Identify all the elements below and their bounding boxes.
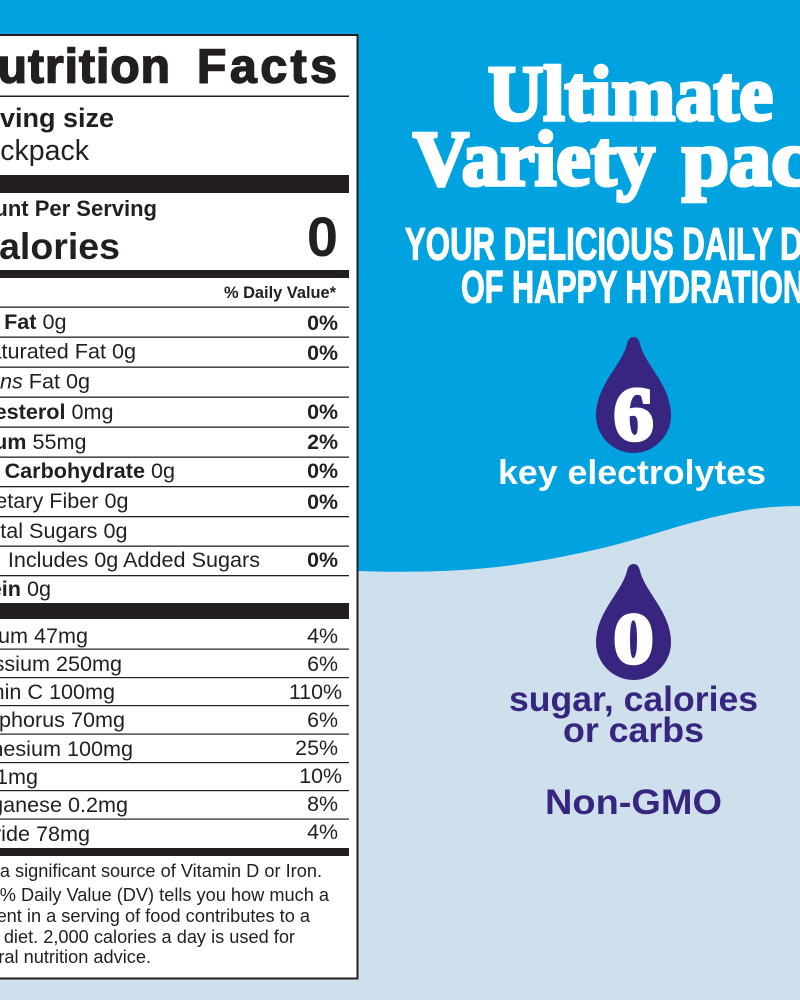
vitamin and mineral percentages: 6% (307, 708, 338, 732)
daily value header: % Daily Value* (224, 284, 337, 302)
serving size (0, 103, 114, 167)
nutrient daily value percentages: 0% (307, 490, 338, 514)
nutrient rows: Includes 0g Added Sugars (8, 547, 260, 572)
title: Ultimate Variety pack (413, 50, 800, 202)
rule under heading (0, 96, 349, 97)
nutrient daily value percentages: 0% (307, 311, 338, 335)
icon: drop with 6: 6 (614, 373, 654, 457)
label: sugar, calories or carbs: sugar, calories (509, 680, 758, 719)
vitamin and mineral percentages: 8% (307, 792, 338, 816)
nutrient daily value percentages (307, 311, 338, 572)
background: blue upper area (0, 0, 800, 600)
background: light blue wave lower area (0, 506, 800, 1000)
medium bar above footnote (0, 848, 349, 856)
amount per serving and calories (0, 196, 338, 268)
vitamin and mineral rows (0, 623, 133, 846)
vitamin and mineral percentages: 4% (307, 820, 338, 844)
medium bar (0, 270, 349, 278)
amount per serving and calories: 0 (307, 205, 338, 268)
label box (0, 35, 358, 978)
thick bar above vitamins (0, 603, 349, 619)
row dividers: macros (0, 306, 349, 576)
label: sugar, calories or carbs: or carbs (563, 711, 704, 750)
title: Ultimate Variety pack: Variety (413, 115, 655, 202)
heading: Nutrition Facts: Facts (197, 40, 337, 94)
footnote text (0, 861, 330, 967)
label: key electrolytes: key electrolytes (498, 454, 766, 492)
icon: drop with 0 (596, 564, 671, 680)
thick bar (0, 175, 349, 193)
nutrient daily value percentages: 0% (307, 459, 338, 483)
row dividers: vitamins and minerals (0, 648, 349, 820)
nutrient daily value percentages: 0% (307, 548, 338, 572)
icon: drop with 6 (596, 337, 671, 457)
vitamin and mineral percentages: 25% (295, 736, 338, 760)
heading: Nutrition Facts (0, 40, 337, 94)
subtitle: daily dose of happy hydration (405, 218, 800, 312)
label: Non-GMO: Non-GMO (545, 783, 722, 822)
nutrient daily value percentages: 2% (307, 430, 338, 454)
label: sugar, calories or carbs (509, 680, 758, 750)
title: Ultimate Variety pack: Ultimate (488, 50, 773, 137)
vitamin and mineral percentages: 4% (307, 624, 338, 648)
nutrient daily value percentages: 0% (307, 341, 338, 365)
vitamin and mineral percentages (289, 624, 342, 844)
nutrient rows (0, 309, 260, 601)
vitamin and mineral percentages: 10% (299, 764, 342, 788)
vitamin and mineral percentages: 110% (289, 680, 342, 704)
nutrient daily value percentages: 0% (307, 400, 338, 424)
icon: drop with 0: 0 (614, 599, 654, 679)
vitamin and mineral percentages: 6% (307, 652, 338, 676)
panel: nutrition facts label (0, 35, 358, 978)
